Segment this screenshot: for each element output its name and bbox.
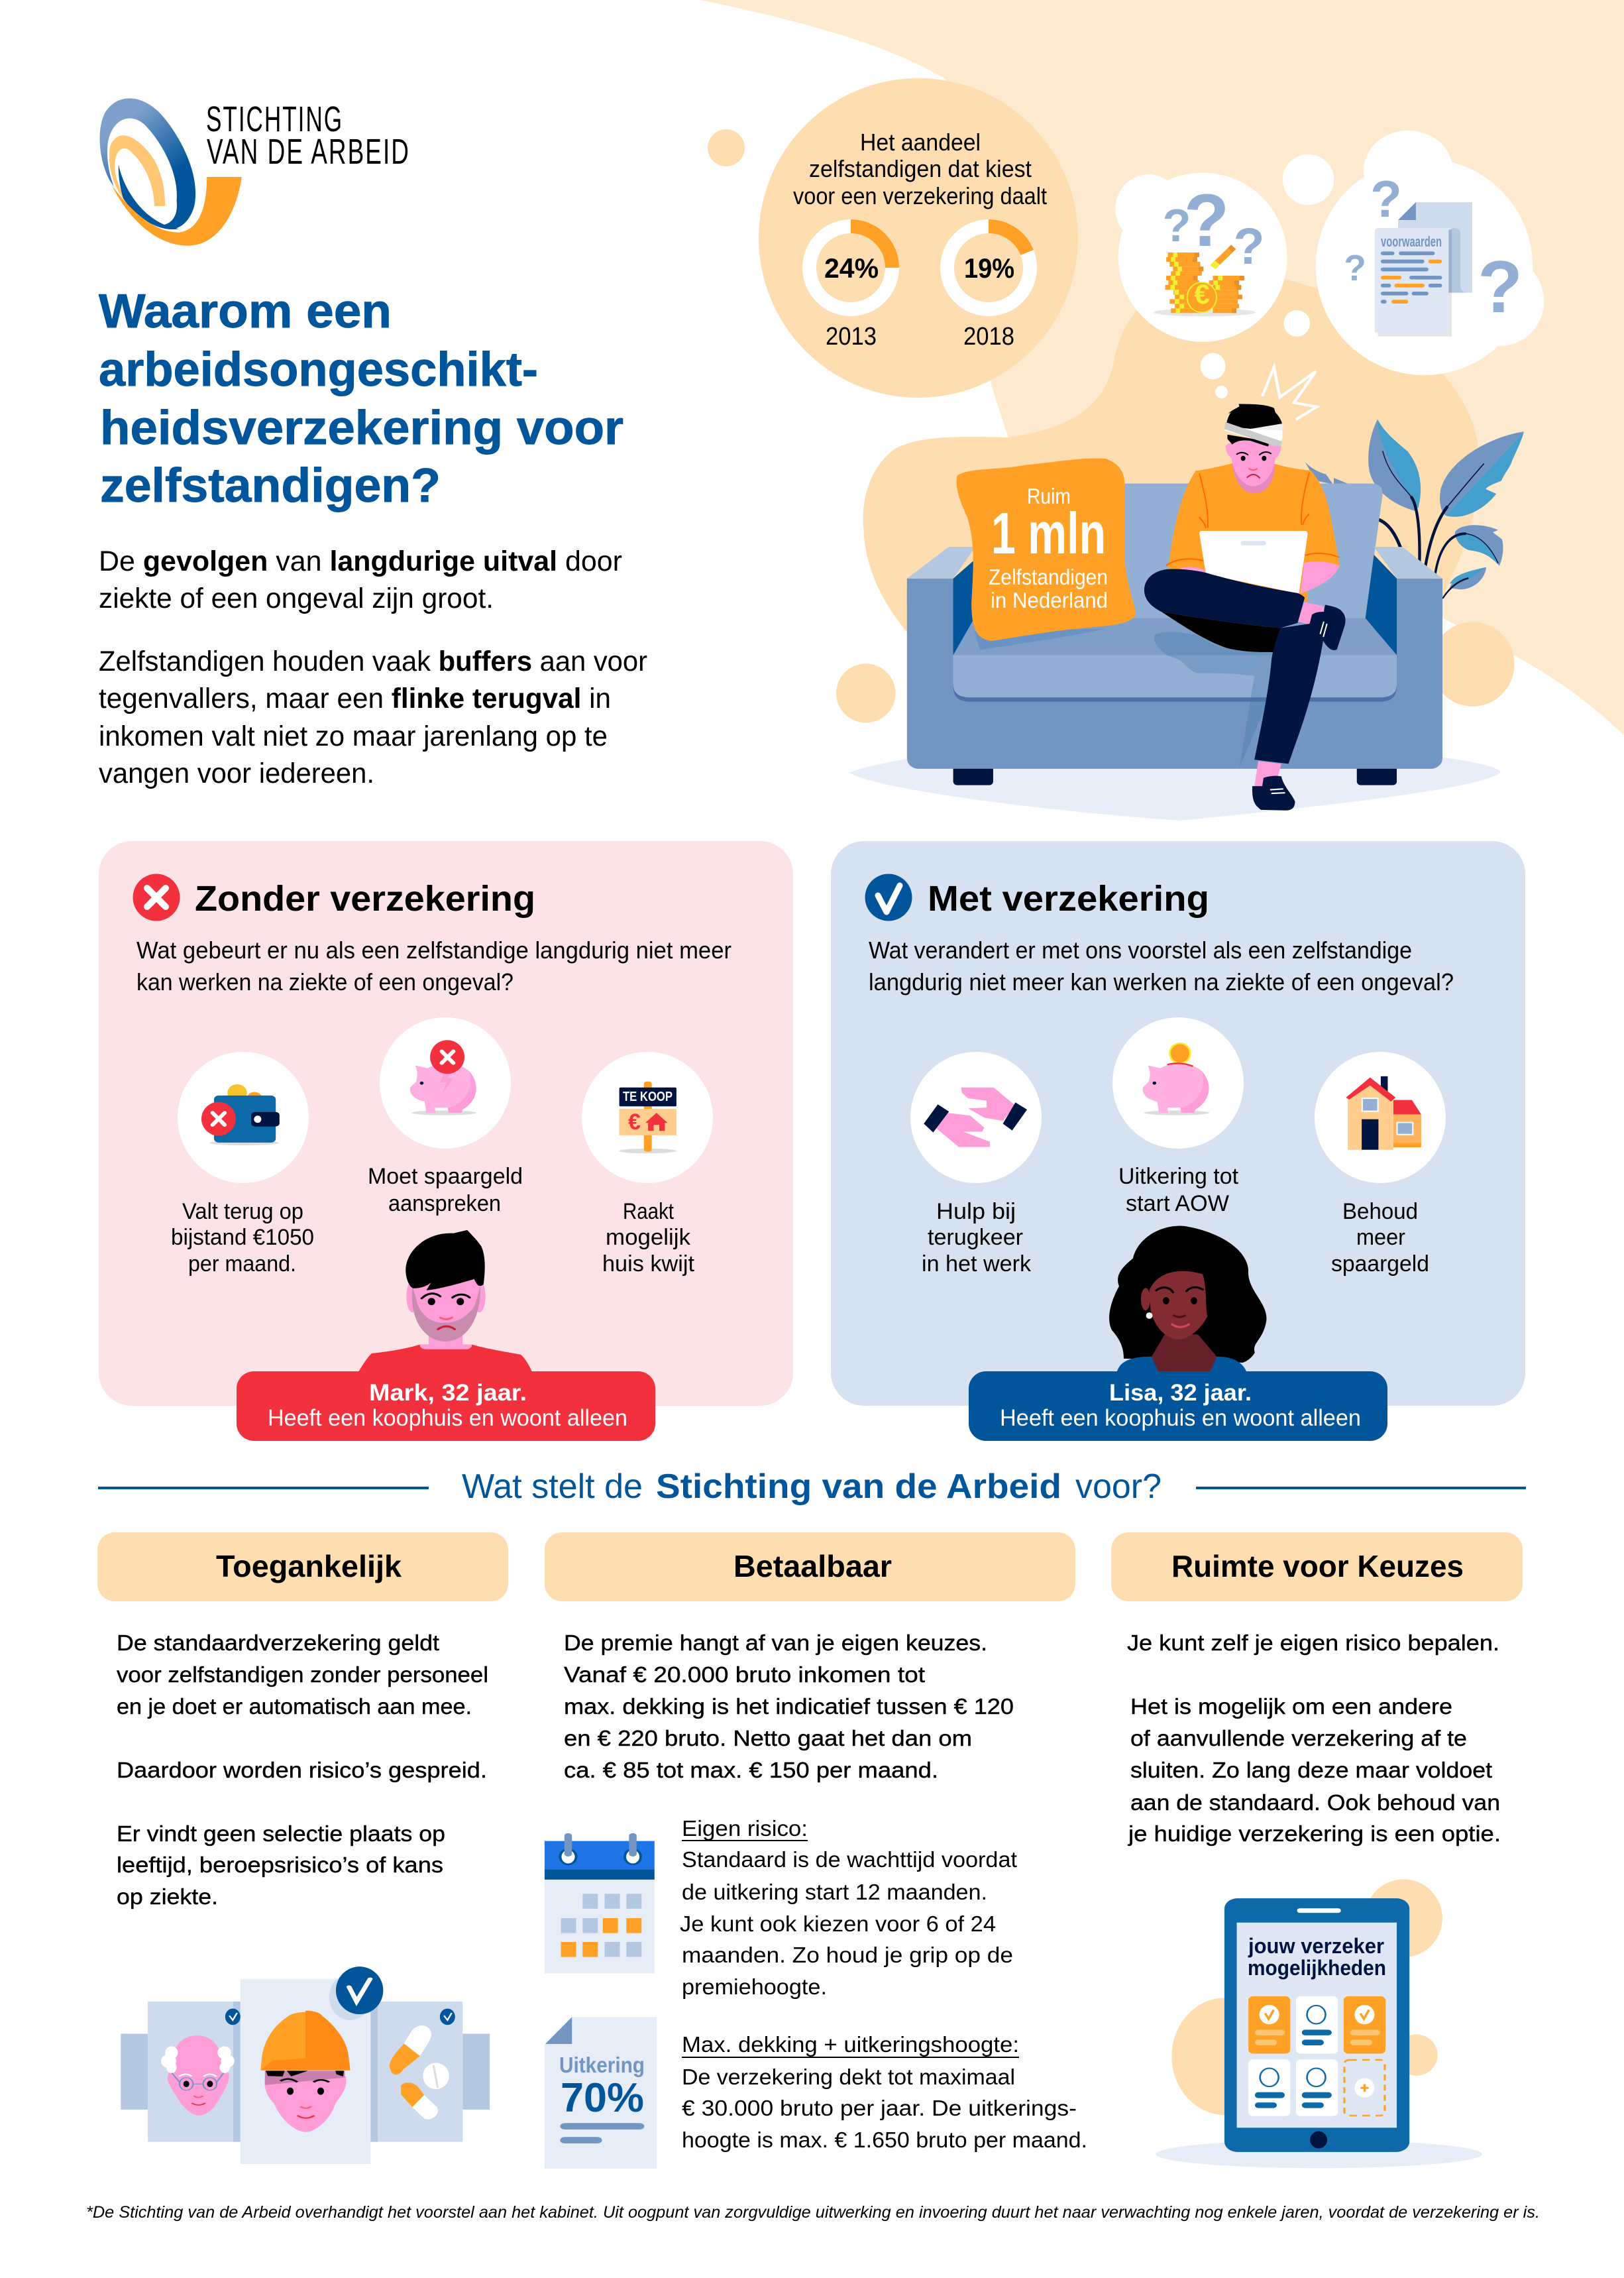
text: max. dekking [682, 2032, 1087, 2152]
text: eigen risico: premiehoogte. [682, 1974, 827, 1999]
column heading: Betaalbaar [733, 1549, 892, 1583]
intro question: Wat verandert er met ons voorstel als een zelfstandige [869, 937, 1412, 964]
item: bijstand: per maand. [188, 1251, 296, 1277]
icon: uitkering document: 70% [561, 2075, 644, 2121]
cushion: 1 mln zelfstandigen [957, 459, 1136, 650]
intro text: ziekte of een ongeval zijn groot. [99, 583, 494, 614]
item: spaargeld behouden [1315, 1052, 1446, 1277]
logo [100, 98, 410, 246]
intro text [99, 545, 647, 789]
donut 2018 [947, 227, 1030, 351]
icon: te koop sign [619, 1082, 677, 1153]
column text: en je doet er automatisch aan mee. [117, 1694, 472, 1719]
icon: coin stacks: € [1194, 278, 1210, 310]
intro text: tegenvallers, maar een flinke terugval in [99, 683, 611, 714]
decorative dot [708, 129, 745, 166]
icon: wallet [201, 1084, 280, 1145]
name banner: Lisa [969, 1371, 1387, 1441]
icon: piggy bank with coin [1143, 1043, 1209, 1115]
column: toegankelijk [97, 1532, 508, 2164]
cushion: 1 mln zelfstandigen: 1 mln [991, 500, 1106, 566]
icon: te koop sign: € [628, 1110, 641, 1135]
icon: coin stacks [1154, 245, 1256, 316]
donut 2018: 19% [964, 253, 1014, 284]
column heading [545, 1532, 1075, 1601]
intro question [869, 937, 1454, 996]
illustration: phone [1156, 1879, 1482, 2168]
section heading [462, 1467, 1162, 1506]
heading: Met verzekering [928, 879, 1209, 919]
heading: Zonder verzekering [195, 879, 535, 919]
item: uitkering: start AOW [1126, 1191, 1229, 1216]
text: eigen risico: de uitkering start 12 maanden. [682, 1880, 987, 1904]
column text [117, 1630, 488, 1909]
name banner: Mark: Heeft een koophuis en woont alleen [268, 1405, 627, 1431]
donut 2018: 2018 [963, 323, 1014, 351]
sofa [907, 483, 1442, 785]
cushion: 1 mln zelfstandigen: in Nederland [991, 588, 1108, 612]
section heading: Stichting van de Arbeid [656, 1467, 1061, 1506]
intro text: vangen voor iedereen. [99, 758, 374, 789]
illustration: phone: mogelijkheden [1248, 1956, 1386, 1980]
logo: STICHTING [206, 99, 343, 139]
item: spaargeld: Moet spaargeld [368, 1164, 523, 1189]
column text: max. dekking is het indicatief tussen € 120 [564, 1694, 1014, 1719]
icon: blue check [865, 874, 912, 921]
intro question: kan werken na ziekte of een ongeval? [136, 968, 514, 996]
item: spaargeld behouden: spaargeld [1331, 1251, 1429, 1277]
question marks: ? [1370, 170, 1402, 228]
column text: Je kunt zelf je eigen risico bepalen. [1127, 1630, 1499, 1655]
stat circle: aandeel zelfstandigen: Het aandeel [860, 129, 981, 156]
donut 2013: 2013 [826, 323, 877, 351]
icon: calendar [545, 1833, 655, 1973]
item: spaargeld behouden: Behoud [1342, 1199, 1418, 1224]
illustration: people cards [121, 1966, 490, 2164]
column text: en € 220 bruto. Netto gaat het dan om [564, 1726, 972, 1750]
item: hulp bij terugkeer: Hulp bij [936, 1199, 1016, 1224]
old man [167, 2035, 229, 2116]
text: eigen risico [680, 1816, 1017, 1999]
worker [264, 2077, 347, 2132]
logo: VAN DE ARBEID [207, 132, 410, 172]
item: bijstand [171, 1052, 314, 1277]
column text: je huidige verzekering is een optie. [1128, 1821, 1501, 1846]
column text: Daardoor worden risico’s gespreid. [117, 1758, 487, 1782]
text: eigen risico: Standaard is de wachttijd voordat [682, 1847, 1017, 1872]
question marks: ? [1233, 218, 1265, 275]
text: max. dekking: De verzekering dekt tot maximaal [682, 2065, 1015, 2089]
question marks: ? [1344, 247, 1366, 288]
name banner: Mark [237, 1371, 655, 1441]
person: Mark [358, 1230, 532, 1373]
name banner: Lisa: Heeft een koophuis en woont alleen [1000, 1405, 1361, 1431]
question marks [1163, 170, 1523, 328]
column text: ca. € 85 tot max. € 150 per maand. [564, 1758, 938, 1782]
text: max. dekking: € 30.000 bruto per jaar. De uitkerings- [682, 2096, 1077, 2120]
title: Waarom een [99, 285, 392, 338]
icon: uitkering document: Uitkering [559, 2053, 645, 2077]
stat circle: aandeel zelfstandigen: voor een verzekering daalt [793, 182, 1047, 209]
background blobs [700, 0, 1624, 821]
column heading: Ruimte voor Keuzes [1171, 1549, 1464, 1583]
column: ruimte voor keuzes [1111, 1532, 1523, 2168]
column text [1127, 1630, 1501, 1846]
question marks: ? [1163, 199, 1191, 251]
item: bijstand: Valt terug op [182, 1199, 303, 1224]
item: spaargeld: aanspreken [388, 1191, 501, 1216]
donut 2013: 24% [824, 253, 879, 284]
stat circle: aandeel zelfstandigen: zelfstandigen dat kiest [809, 155, 1032, 182]
column text: sluiten. Zo lang deze maar voldoet [1130, 1758, 1492, 1782]
text: eigen risico: Eigen risico: [682, 1816, 808, 1841]
footnote: *De Stichting van de Arbeid overhandigt het voorstel aan het kabinet. Uit oogpunt van zorgvuldige uitwerking en invoering duurt het naar verwachting nog enkele jaren, voordat de verzekering er is. [86, 2203, 1540, 2222]
column text: leeftijd, beroepsrisico’s of kans [117, 1852, 443, 1877]
column text: De standaardverzekering geldt [117, 1630, 439, 1655]
icon: red cross [133, 874, 180, 921]
section heading: voor? [1075, 1467, 1162, 1506]
intro question [136, 937, 731, 996]
item: hulp bij terugkeer: terugkeer [928, 1225, 1023, 1250]
panel: met verzekering [831, 841, 1525, 1441]
icon: uitkering document [545, 2017, 657, 2169]
text: max. dekking: hoogte is max. € 1.650 bruto per maand. [682, 2128, 1087, 2152]
icon: broken piggy bank [410, 1040, 476, 1115]
intro text: De gevolgen van langdurige uitval door [99, 545, 622, 577]
column text: of aanvullende verzekering af te [1130, 1726, 1467, 1750]
column: betaalbaar [545, 1532, 1087, 2169]
intro text: Zelfstandigen houden vaak buffers aan voor [99, 646, 647, 677]
text: max. dekking: Max. dekking + uitkeringshoogte: [682, 2032, 1019, 2057]
column heading [97, 1532, 508, 1601]
item: hulp bij terugkeer [910, 1052, 1042, 1277]
column heading: Toegankelijk [216, 1549, 402, 1583]
section heading: Wat stelt de [462, 1467, 643, 1506]
person: Lisa [1109, 1226, 1266, 1373]
item: huis: Raakt [623, 1199, 674, 1224]
question marks: ? [1184, 179, 1229, 262]
item: huis: huis kwijt [602, 1251, 695, 1277]
item: spaargeld behouden: meer [1356, 1225, 1405, 1250]
name banner: Mark: Mark, 32 jaar. [369, 1380, 527, 1406]
item: bijstand: bijstand €1050 [171, 1225, 314, 1250]
intro question: langdurig niet meer kan werken na ziekte of een ongeval? [869, 968, 1454, 996]
cushion: 1 mln zelfstandigen: Zelfstandigen [989, 565, 1108, 589]
panel: zonder verzekering [99, 841, 793, 1441]
icon: voorwaarden document [1375, 202, 1472, 337]
column text: voor zelfstandigen zonder personeel [117, 1662, 488, 1687]
name banner: Lisa: Lisa, 32 jaar. [1109, 1380, 1252, 1406]
illustration: phone: jouw verzeker [1248, 1934, 1384, 1958]
icon: voorwaarden document: voorwaarden [1381, 233, 1442, 250]
donut 2013 [810, 227, 892, 351]
intro question: Wat gebeurt er nu als een zelfstandige langdurig niet meer [136, 937, 731, 964]
item: uitkering [1112, 1017, 1244, 1216]
column text: Het is mogelijk om een andere [1130, 1694, 1452, 1719]
column text: Er vindt geen selectie plaats op [117, 1821, 445, 1846]
item: huis: mogelijk [606, 1225, 691, 1250]
text: eigen risico: maanden. Zo houd je grip op de [682, 1943, 1013, 1967]
icon: house [1346, 1076, 1421, 1150]
column text: De premie hangt af van je eigen keuzes. [564, 1630, 987, 1655]
text: eigen risico: Je kunt ook kiezen voor 6 of 24 [680, 1911, 996, 1936]
person on sofa with laptop [1144, 404, 1346, 811]
item: spaargeld [368, 1017, 523, 1216]
item: huis [582, 1052, 713, 1277]
column text: Vanaf € 20.000 bruto inkomen tot [564, 1662, 925, 1687]
plant [1305, 420, 1524, 598]
title: zelfstandigen? [100, 459, 441, 512]
column text: aan de standaard. Ook behoud van [1130, 1790, 1500, 1815]
title: heidsverzekering voor [100, 402, 623, 455]
question marks: ? [1478, 246, 1523, 328]
icon: te koop sign: TE KOOP [623, 1090, 673, 1104]
item: uitkering: Uitkering tot [1118, 1164, 1239, 1189]
cushion: 1 mln zelfstandigen: Ruim [1027, 484, 1071, 508]
column text [564, 1630, 1014, 1782]
column heading [1111, 1532, 1523, 1601]
title: arbeidsongeschikt- [99, 343, 538, 396]
stat circle: aandeel zelfstandigen [759, 78, 1078, 398]
icon: pain lightning [1263, 367, 1317, 419]
title [99, 285, 623, 512]
icon: hands [924, 1088, 1027, 1147]
thought bubbles [1115, 131, 1544, 398]
item: hulp bij terugkeer: in het werk [922, 1251, 1032, 1277]
intro text: inkomen valt niet zo maar jarenlang op te [99, 720, 608, 752]
pills [404, 2025, 431, 2056]
column text: op ziekte. [117, 1884, 218, 1909]
